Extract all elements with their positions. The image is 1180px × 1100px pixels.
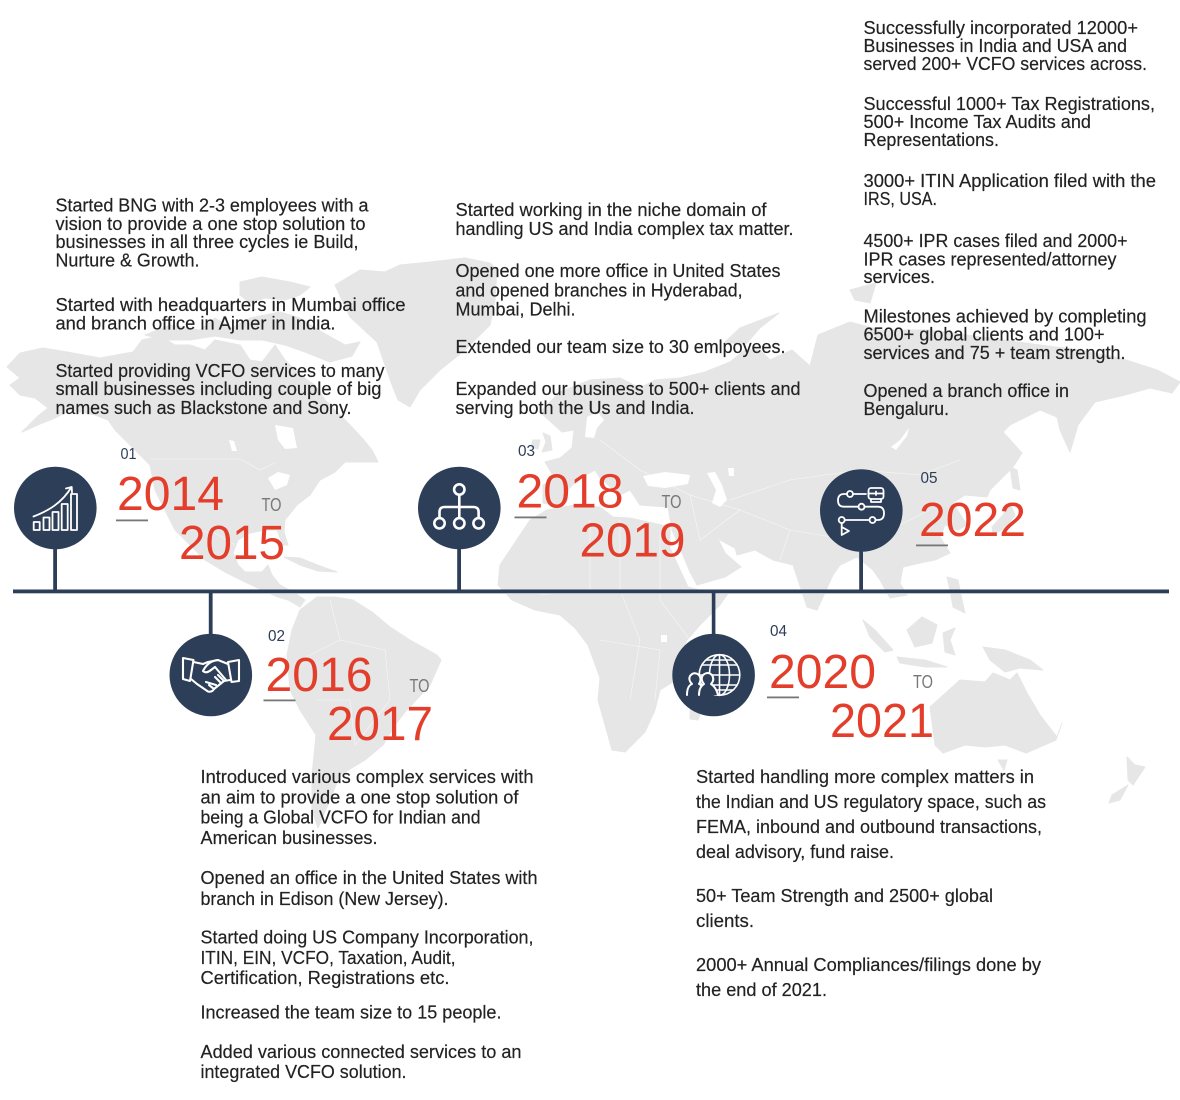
description: Businesses in India and USA and [864, 36, 1127, 56]
description: FEMA, inbound and outbound transactions, [696, 817, 1042, 837]
description [56, 196, 406, 418]
icon: globe and people [672, 634, 755, 716]
description: vision to provide a one stop solution to [56, 214, 366, 234]
description: handling US and India complex tax matter. [456, 219, 794, 239]
end year: 2019 [580, 514, 686, 568]
description: the end of 2021. [696, 980, 827, 1000]
horizontal timeline axis [13, 590, 1169, 594]
step number: 04 [770, 623, 787, 640]
milestone 3: 2018 to 2019 [418, 200, 800, 591]
description: Started doing US Company Incorporation, [200, 928, 534, 948]
world map background [7, 258, 1180, 828]
year: 2022 [919, 494, 1026, 547]
description: deal advisory, fund raise. [696, 842, 894, 862]
step number: 01 [120, 446, 137, 463]
end year: 2017 [327, 698, 433, 751]
description: an aim to provide a one stop solution of [200, 788, 520, 808]
description: and opened branches in Hyderabad, [456, 280, 742, 300]
description: Certification, Registrations etc. [200, 968, 450, 988]
description: Opened one more office in United States [456, 261, 780, 281]
description [696, 767, 1046, 1000]
description: Increased the team size to 15 people. [200, 1002, 502, 1022]
to label: TO [410, 676, 430, 696]
country borders [150, 440, 960, 745]
stem [859, 548, 863, 591]
description: the Indian and US regulatory space, such as [696, 792, 1046, 812]
description: Extended our team size to 30 emlpoyees. [456, 337, 786, 357]
icon: org structure [418, 467, 501, 549]
description: IPR cases represented/attorney [864, 250, 1116, 270]
year: 2014 [117, 468, 224, 521]
step number: 05 [920, 470, 938, 487]
description: clients. [696, 911, 754, 931]
end year: 2021 [830, 695, 934, 748]
description: Successful 1000+ Tax Registrations, [864, 94, 1155, 114]
underline [116, 520, 148, 521]
stem [209, 591, 213, 637]
description [200, 767, 538, 1082]
description: Opened an office in the United States with [200, 868, 538, 888]
description: 50+ Team Strength and 2500+ global [696, 886, 993, 906]
description: Added various connected services to an [200, 1042, 522, 1062]
description: services. [864, 267, 935, 287]
description: and branch office in Ajmer in India. [56, 314, 336, 334]
description: IRS, USA. [864, 189, 937, 209]
description: Milestones achieved by completing [864, 306, 1146, 326]
description: served 200+ VCFO services across. [864, 54, 1147, 74]
icon: growth chart [14, 467, 97, 549]
description: Introduced various complex services with [200, 767, 534, 787]
stem [712, 591, 715, 637]
description: Expanded our business to 500+ clients and [456, 379, 800, 399]
description: Opened a branch office in [864, 381, 1069, 401]
year: 2018 [516, 466, 624, 518]
to label: TO [662, 492, 682, 512]
description: 3000+ ITIN Application filed with the [864, 171, 1156, 191]
description: American businesses. [200, 828, 378, 848]
description: Nurture & Growth. [56, 250, 200, 270]
description: 2000+ Annual Compliances/filings done by [696, 955, 1041, 975]
description: Started handling more complex matters in [696, 767, 1034, 787]
year: 2016 [266, 649, 372, 702]
description: Successfully incorporated 12000+ [864, 18, 1138, 38]
underline [514, 516, 546, 518]
description: Bengaluru. [864, 399, 949, 419]
description: integrated VCFO solution. [200, 1062, 406, 1082]
icon: handshake [170, 634, 252, 716]
description: Representations. [864, 130, 999, 150]
milestone 5: 2022 [820, 18, 1156, 591]
step number: 03 [518, 443, 535, 460]
description: Started with headquarters in Mumbai office [56, 295, 406, 315]
description: Started providing VCFO services to many [56, 361, 384, 381]
description: names such as Blackstone and Sony. [56, 398, 352, 418]
description: branch in Edison (New Jersey). [200, 889, 448, 909]
inland water and coast cut-outs [229, 412, 909, 642]
milestone 1: 2014 to 2015 [14, 196, 406, 591]
description: being a Global VCFO for Indian and [200, 808, 480, 828]
end year: 2015 [179, 517, 285, 570]
description: Started BNG with 2-3 employees with a [56, 196, 369, 216]
description [456, 200, 800, 418]
milestone 2: 2016 to 2017 [170, 591, 538, 1082]
description: services and 75 + team strength. [864, 343, 1126, 363]
to label: TO [262, 495, 282, 515]
milestone 4: 2020 to 2021 [672, 591, 1046, 1000]
description: 500+ Income Tax Audits and [864, 112, 1091, 132]
to label: TO [913, 672, 933, 692]
description: 6500+ global clients and 100+ [864, 324, 1104, 344]
underline [264, 700, 296, 701]
underline [916, 544, 948, 546]
description: Started working in the niche domain of [456, 200, 768, 220]
description: small businesses including couple of big [56, 379, 382, 399]
stem [53, 545, 57, 591]
description: Mumbai, Delhi. [456, 300, 576, 320]
description: ITIN, EIN, VCFO, Taxation, Audit, [200, 948, 456, 968]
description: businesses in all three cycles ie Build, [56, 232, 358, 252]
underline [767, 696, 799, 698]
description: 4500+ IPR cases filed and 2000+ [864, 231, 1128, 251]
year: 2020 [769, 646, 876, 699]
step number: 02 [268, 628, 285, 645]
icon: roadmap path [820, 469, 903, 552]
description [864, 18, 1156, 419]
description: serving both the Us and India. [456, 398, 694, 418]
stem [457, 545, 461, 591]
